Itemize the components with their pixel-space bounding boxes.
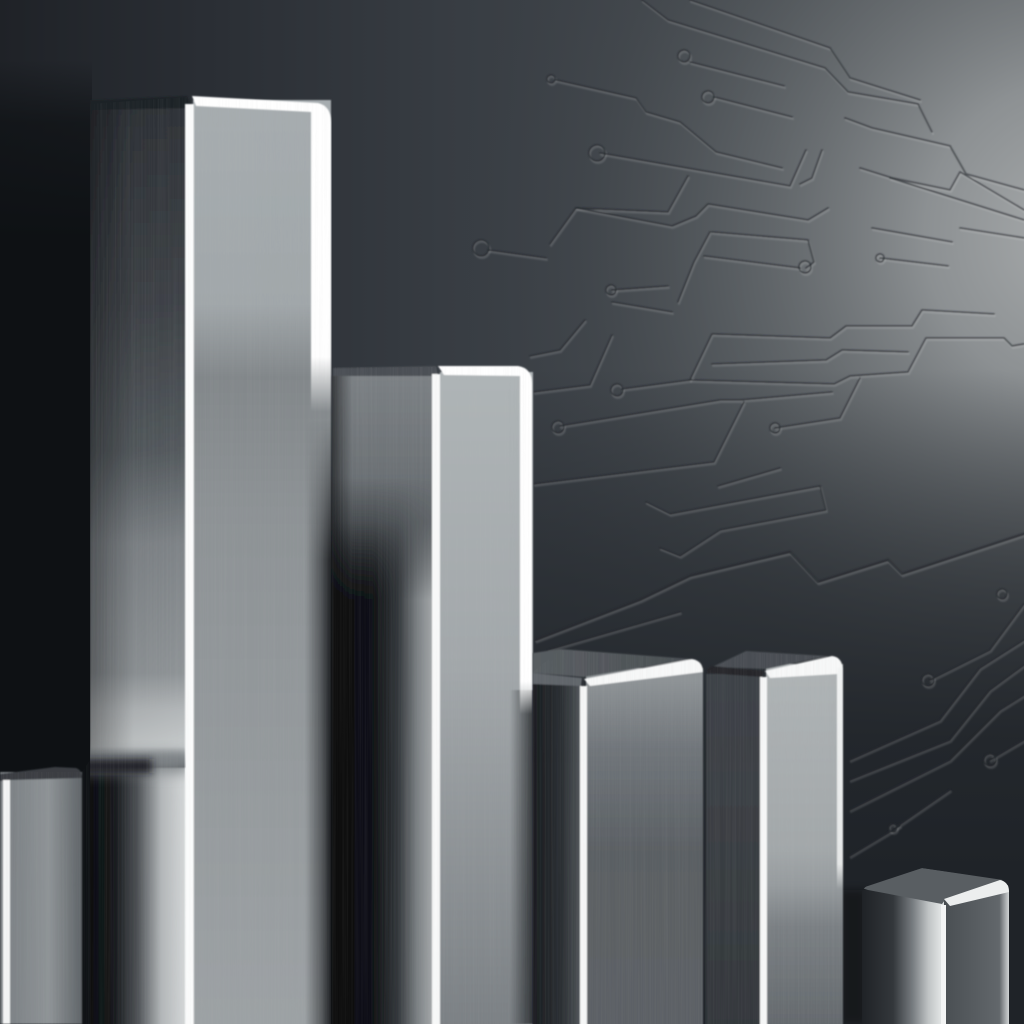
bar 5 front edge highlight: [941, 905, 946, 1024]
bar 3 top cap: [533, 649, 692, 677]
bar 4 top edge highlight: [765, 656, 843, 678]
bar 1 lower left face: [90, 768, 187, 1024]
bar 4 right face: [766, 664, 843, 1024]
bar 5 left face: [862, 890, 944, 1024]
bar 2: [332, 366, 533, 1024]
bar 1 shaded junction band: [80, 754, 190, 773]
bar 5 top edge highlight: [944, 880, 1009, 906]
bar 3 left face: [533, 680, 581, 1024]
bar 2 right face: [440, 372, 533, 1024]
bar 1 lower right shadow: [307, 432, 332, 1024]
bar 2 lower left face: [332, 376, 433, 1024]
bar 5 top cap: [862, 868, 1003, 904]
bar 3 front edge highlight: [580, 686, 587, 1024]
bar 4: [706, 651, 843, 1024]
bar 3 top edge highlight: [584, 659, 703, 686]
bar 3 right face: [586, 668, 703, 1024]
bar 2 top bevel: [333, 366, 438, 376]
bar 5: [862, 868, 1009, 1024]
bar 4 front edge highlight: [760, 677, 767, 1024]
bar 3 left lip: [533, 673, 582, 686]
brushed metal texture: [86, 99, 714, 1024]
bar 1 right face: [193, 100, 331, 1024]
bar 4 right edge highlight: [837, 668, 843, 1024]
bar 1 top edge: [192, 96, 331, 440]
bar 5 right face: [944, 885, 1009, 1024]
bar 4 top cap: [712, 651, 828, 669]
bar 4 left face: [706, 674, 761, 1024]
bar 2 top and right edge: [438, 366, 532, 725]
bar 1 left face: [90, 100, 187, 770]
bar 1 front edge highlight: [185, 104, 194, 1024]
embossed circuit traces: [473, 0, 1024, 858]
bar 3: [533, 649, 703, 1024]
bar 1 (tallest): [80, 96, 332, 1024]
bar 4 left lip: [706, 666, 764, 677]
bar 1 top bevel: [107, 96, 190, 109]
bar 2 front edge highlight: [432, 374, 440, 1024]
bar 0 (cropped left): [0, 767, 82, 1024]
bar 5 wall shadow: [840, 890, 866, 1024]
bar 2 upper left face: [332, 376, 433, 600]
